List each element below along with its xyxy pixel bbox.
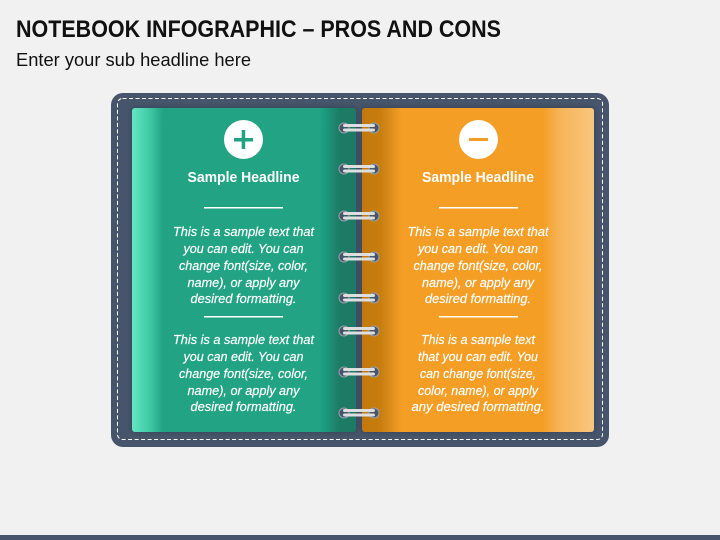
cons text block 1: This is a sample text that [408, 224, 550, 239]
cover stitching [118, 98, 602, 440]
cons text block 2: that you can edit. You [418, 349, 538, 364]
cons text block 2 [412, 332, 544, 414]
cons text block 1 [408, 224, 550, 306]
pros text block 1: This is a sample text that [173, 224, 315, 239]
panel: cons page [362, 108, 594, 432]
pros text block 2 [173, 332, 315, 414]
notebook cover [111, 93, 609, 447]
cons text block 1: you can edit. You can [417, 241, 538, 256]
divider [204, 207, 283, 208]
subtitle: Enter your sub headline here [16, 50, 251, 70]
pros text block 2: you can edit. You can [183, 349, 304, 364]
title: NOTEBOOK INFOGRAPHIC – PROS AND CONS [16, 16, 501, 43]
orange page [362, 108, 594, 432]
pros text block 1: you can edit. You can [183, 241, 304, 256]
cons text block 1: change font(size, color, [414, 258, 542, 273]
cons heading: Sample Headline [422, 169, 534, 186]
pros text block 2: change font(size, color, [179, 366, 308, 381]
divider [204, 316, 283, 318]
cons text block 1: desired formatting. [425, 291, 531, 306]
notebook [111, 93, 609, 447]
green page [132, 108, 356, 432]
bottom bar [0, 535, 720, 540]
cons text block 2: any desired formatting. [412, 399, 544, 414]
pros text block 2: desired formatting. [190, 399, 296, 414]
pros text block 1: change font(size, color, [179, 258, 308, 273]
pros text block 2: name), or apply any [188, 383, 301, 398]
pros text block 2: This is a sample text that [173, 332, 315, 347]
pros text block 1: name), or apply any [188, 275, 301, 290]
divider [439, 207, 518, 208]
divider [439, 316, 518, 318]
cons text block 1: name), or apply any [422, 275, 535, 290]
pros heading: Sample Headline [188, 169, 300, 186]
icon: plus [224, 120, 263, 159]
spiral binding [339, 123, 379, 418]
cons text block 2: color, name), or apply [418, 383, 539, 398]
cons text block 2: can change font(size, [420, 366, 536, 381]
pros text block 1: desired formatting. [190, 291, 296, 306]
pros text block 1 [173, 224, 315, 306]
panel: pros page [132, 108, 356, 432]
cons text block 2: This is a sample text [421, 332, 536, 347]
icon: minus [459, 120, 498, 159]
